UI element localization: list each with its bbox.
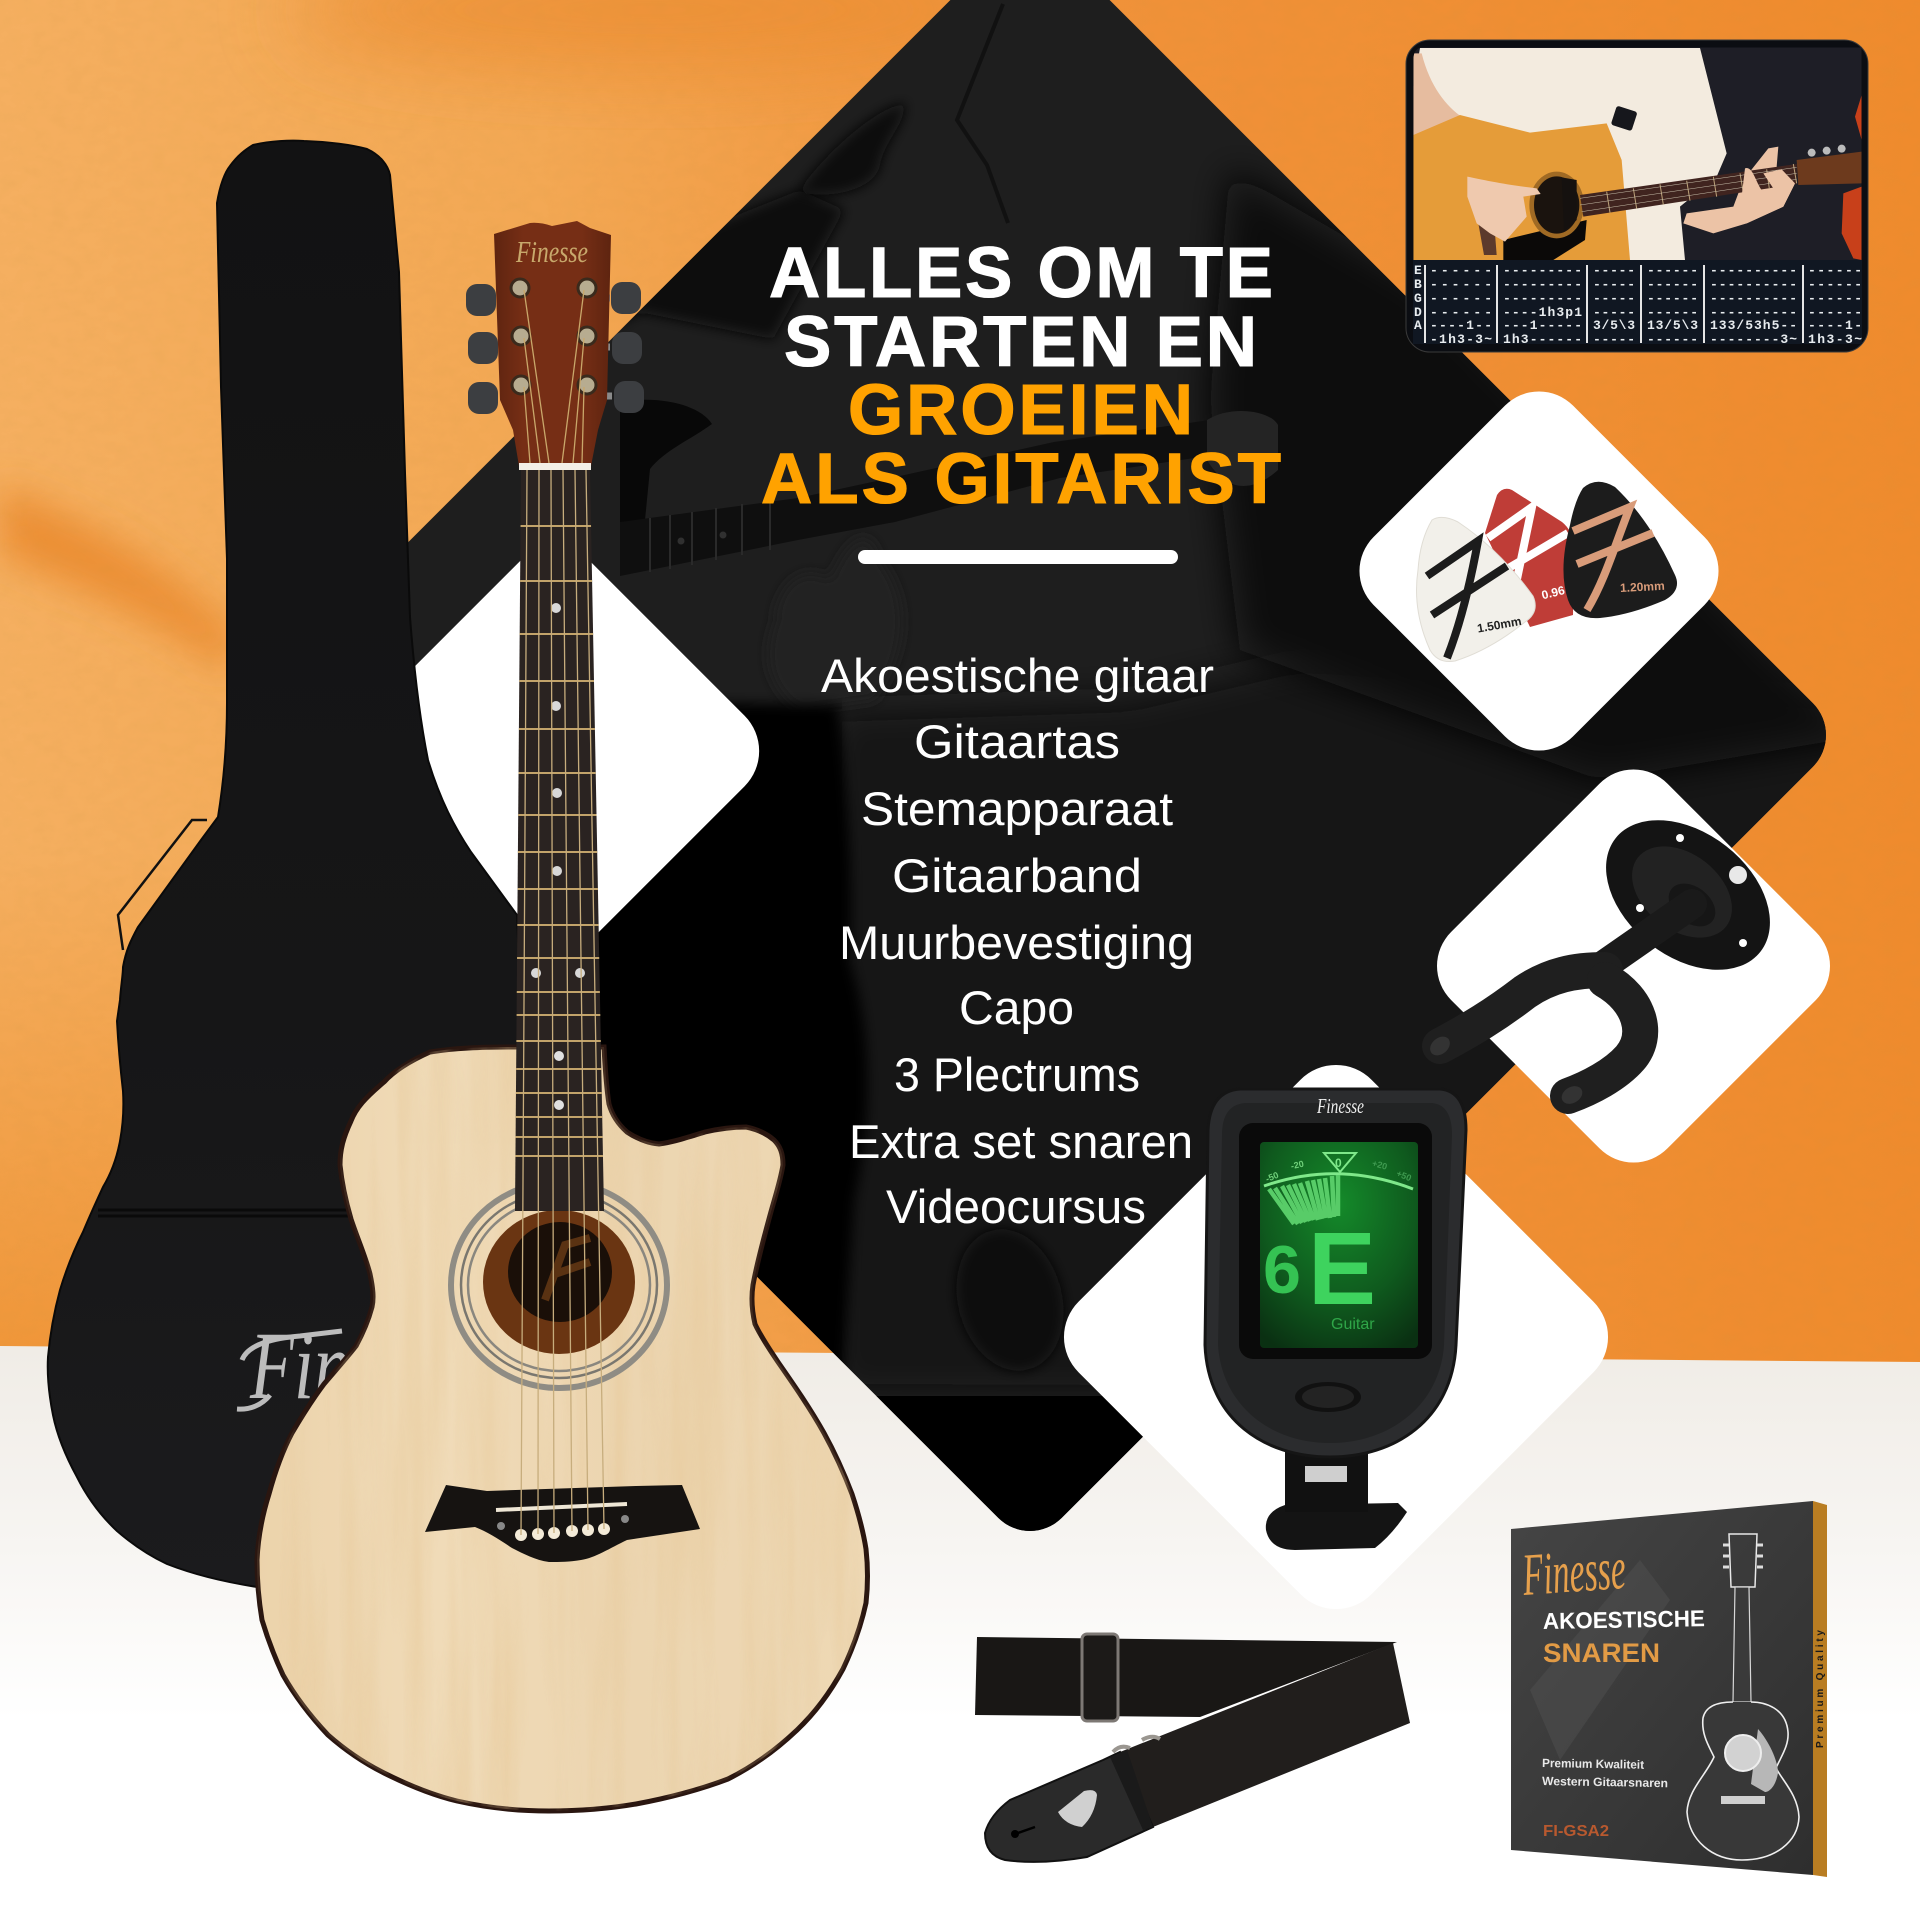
strap metal rings [1113,1737,1160,1752]
strap hole [1015,1827,1035,1834]
tuner brand: Finesse [1316,1094,1364,1118]
panel: white diamond for picks [1340,372,1738,770]
bag zipper [98,1210,350,1216]
package watermark [1530,1560,1670,1760]
panel: large black diamond with dim guitarist photo [408,0,1826,1531]
microphone [1611,106,1638,131]
acoustic neck [1580,164,1797,217]
list: included items: Videocursus [886,1180,1146,1233]
bag logo [237,1312,350,1419]
tablature strip: 3/5\3 [1593,318,1635,333]
tablature strip: ------ [1647,291,1698,306]
photo: black shadow left [598,700,869,1368]
tablature strip: ------ [1647,332,1698,347]
photo: dark sleeve and beard [610,4,1008,339]
red guitar [1842,95,1862,260]
package guitar line drawing [1687,1534,1799,1860]
tablature strip: B [1414,277,1422,292]
fingers [1740,168,1795,223]
red pick: 0.96 [1540,583,1566,602]
package title: AKOESTISCHE [1543,1605,1705,1634]
shirt [1413,48,1727,260]
title: heading: STARTEN EN [784,303,1257,382]
tablature strip: ------ [1430,277,1492,292]
tablature strip: 133/53h5-- [1710,318,1797,333]
strap [1478,223,1497,255]
tuner screen: -20 [1290,1159,1305,1171]
tablature strip: ---1----- [1503,318,1582,333]
tablature strip: ------ [1647,305,1698,320]
tablature strip: ----- [1593,305,1635,320]
tablature strip: ----- [1593,332,1635,347]
tablature strip [1413,260,1862,347]
tablature strip: ----- [1593,291,1635,306]
bag logo: Fin [249,1312,350,1419]
strap upper band [975,1637,1397,1717]
tablature strip: ---------- [1710,305,1797,320]
package front [1511,1501,1813,1875]
tablature strip: 13/5\3 [1647,318,1698,333]
tablature strip: ---------- [1710,263,1797,278]
photo: right dark band [1210,170,1860,780]
panel: tablet with video course [1406,40,1868,352]
panel: acoustic guitar [250,221,875,1820]
package code: FI-GSA2 [1543,1823,1609,1840]
tablature strip: ------ [1808,277,1862,292]
tablature strip: ------ [1647,263,1698,278]
tablature strip: ------ [1647,277,1698,292]
photo: dark oval [955,1228,1065,1372]
headstock [1797,152,1862,185]
tablature strip: ----1h3p1 [1503,305,1582,320]
photo bottom black strip [876,1396,1143,1531]
package brand: Finesse [1520,1535,1628,1608]
guitar fretboard [500,470,620,1211]
guitar bridge [425,1485,700,1562]
strap logo [1058,1790,1097,1827]
tuner screen: 0 [1335,1156,1342,1170]
bag carrying loop [118,820,207,950]
tablature strip: --------3~ [1710,332,1797,347]
tablature strip: ----- [1593,277,1635,292]
package description: Western Gitaarsnaren [1542,1774,1668,1790]
tablature strip: ------ [1430,305,1492,320]
tuner screen: -50 [1264,1170,1280,1184]
list: included items: 3 Plectrums [894,1048,1140,1101]
list: included items: Muurbevestiging [839,916,1194,969]
guitar nut [519,463,591,470]
guitar sound hole [483,1210,635,1354]
title: heading: GROEIEN [848,371,1193,450]
panel: guitar strap [975,1634,1410,1862]
tablature strip: ------ [1808,263,1862,278]
title: heading: ALLES OM TE [769,234,1273,313]
tablature strip: G [1414,291,1422,306]
package description [1542,1756,1668,1790]
tuner clip base [1266,1440,1407,1550]
icon: wall mount hook [1426,790,1799,1107]
icon: clip-on tuner [1205,1089,1466,1550]
tablature strip: E [1414,263,1422,278]
tablature strip: ----- [1593,263,1635,278]
tablature strip: ----1-- [1430,318,1492,333]
tuner screen: 6 [1263,1232,1301,1308]
strap leather end [985,1752,1153,1862]
forearm and fretting hand [1683,147,1795,233]
list: included items: Gitaarband [892,849,1142,902]
tablature strip: D [1414,305,1422,320]
package title: SNAREN [1543,1638,1660,1668]
tuner power button [1295,1382,1361,1412]
tablature strip: A [1414,318,1422,333]
tablature strip: --------- [1503,291,1582,306]
guitar strings [521,470,604,1535]
list: included items: Capo [959,981,1074,1034]
photo: hand on neck [832,688,875,702]
list: included items: Stemapparaat [861,782,1173,835]
guitar rosette [451,1182,667,1388]
tablature strip: ----1- [1808,318,1862,333]
photo: lower wall area [830,660,1860,1400]
package title [1543,1605,1705,1668]
tablature strip: ---------- [1710,277,1797,292]
package side text: Premium Quality [1815,1630,1826,1748]
background: orange textured wall [0,0,1920,1400]
black pick: 1.20mm [1620,579,1665,595]
headstock logo: Finesse [515,234,588,269]
title: heading: ALS GITARIST [761,440,1281,519]
panel: strings package [1511,1501,1827,1877]
divider bar under heading [858,550,1178,564]
package description: Premium Kwaliteit [1542,1756,1644,1772]
guitar body [250,1040,875,1820]
tuner screen: +50 [1395,1168,1413,1183]
tablature strip: ------ [1808,291,1862,306]
white pick [1416,517,1535,662]
tablature strip: 1h3-3~ [1808,332,1862,347]
white pick: 1.50mm [1476,614,1523,636]
tablature strip: --------- [1503,263,1582,278]
tuner screen: E [1308,1211,1376,1326]
background: white floor [0,1346,1920,1920]
title: heading [761,234,1281,519]
tablature strip: ------ [1808,305,1862,320]
tablature strip: 1h3------ [1503,332,1582,347]
picking hand [1467,177,1541,242]
list: included items: Akoestische gitaar [821,649,1214,702]
list: included items: Gitaartas [914,715,1120,768]
video still: guitarist playing [1413,47,1862,261]
tablature strip: -1h3-3~ [1430,332,1492,347]
tuner screen [1239,1123,1432,1359]
tablature strip: --------- [1503,277,1582,292]
tuner screen: Guitar [1331,1316,1375,1333]
photo: electric guitar [620,400,1278,576]
guitar body [1413,115,1630,260]
tablature strip: ---------- [1710,291,1797,306]
panel: white diamond for tuner [1043,1044,1629,1630]
guitar headstock [494,221,611,466]
tuner body [1205,1089,1466,1457]
tablature strip: ------ [1430,291,1492,306]
panel: guitar gig bag [48,141,525,1587]
strap slider buckle [1082,1634,1118,1721]
strap leather band stripe [1110,1750,1153,1830]
left upper arm [1413,53,1462,137]
list: included items [821,649,1214,1233]
tuner screen: +20 [1371,1158,1388,1172]
panel: white diamond for wall mount [1417,750,1850,1182]
guitar tuning pegs [466,282,644,414]
red pick [1485,489,1574,627]
black pick [1563,482,1677,618]
tablature strip: ------ [1430,263,1492,278]
panel: white diamond left behind guitar [330,526,780,976]
list: included items: Extra set snaren [849,1115,1193,1168]
icon: three guitar picks [1416,482,1677,662]
strap lower band [1120,1643,1410,1827]
package spine [1813,1501,1827,1877]
headstock tuner posts [511,279,596,394]
